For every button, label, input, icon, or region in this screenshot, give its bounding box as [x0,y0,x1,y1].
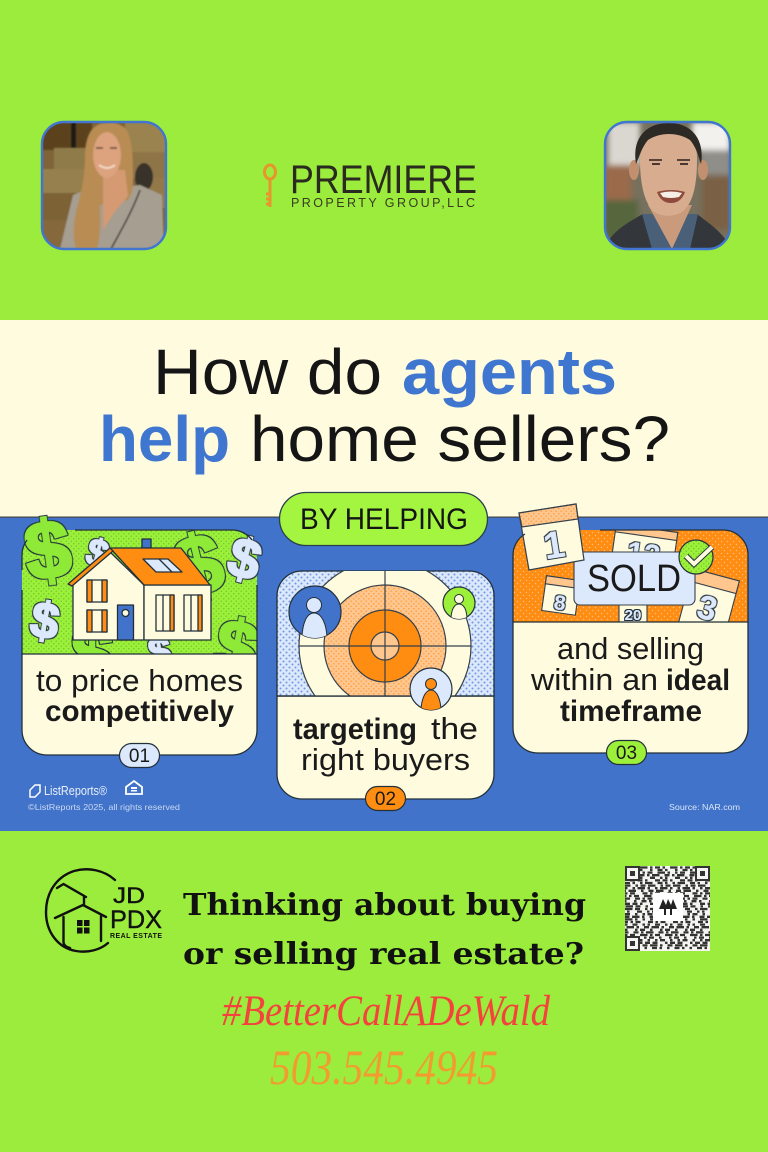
logo: Premiere Property Group: PROPERTY GROUP,LLC [291,196,475,210]
card 1 illustration [22,514,263,654]
icon: green check badge [679,540,713,574]
card 2 caption text: targeting [293,713,417,746]
card 2 caption text: the [431,711,478,746]
icon: green person [443,587,475,620]
pill heading: by helping: BY HELPING [300,503,468,536]
card 3 illustration: 12 [625,536,662,573]
card 3 caption text [530,631,730,728]
blue content panel [0,516,768,831]
photo: woman agent [42,122,166,249]
card 2 caption text [293,711,478,777]
panel: card 2 targeting [277,560,494,810]
icon: house [68,539,211,640]
calendar: 8 [541,576,580,617]
footer: ListReports branding: ListReports® [44,783,107,798]
title: help [99,403,230,475]
SOLD plate: SOLD [587,558,681,600]
icon: ListReports mark [30,785,40,797]
card 3 caption text: and selling [557,631,704,666]
badge 03 [606,740,646,764]
badge 03: 03 [616,743,637,764]
card 2 caption panel [277,696,494,799]
card 1 illustration: $ [222,524,268,593]
logo: JD PDX Real Estate [46,869,162,952]
cream title band [0,320,768,518]
pill heading: by helping [280,492,488,546]
logo: Premiere Property Group [264,158,477,210]
card 1 illustration: $ [71,612,113,697]
icon: equal housing [126,781,142,794]
card 1 outline [22,530,257,654]
badge 01 [120,744,160,768]
card 1 caption text: to price homes [36,663,243,698]
card 2 target illustration [276,570,495,697]
call to action text [183,888,586,972]
icon: house in oval [46,869,115,952]
SOLD plate [574,552,695,605]
card 1 illustration: $ [19,502,77,599]
icon: gold key [264,165,276,207]
logo: JD PDX Real Estate: REAL ESTATE [110,933,162,940]
phone number: 503.545.4945 [270,1039,498,1095]
card 3 outline [513,530,748,622]
logo: JD PDX Real Estate: JD [113,883,145,908]
call to action text: Thinking about buying [183,888,586,923]
hashtag: #BetterCallADeWald [222,988,550,1035]
card 1 illustration: $ [208,603,264,694]
photo: man agent [604,122,730,249]
logo: Premiere Property Group: PREMIERE [290,158,477,202]
card 3 caption text: timeframe [560,695,702,728]
card 3 illustration: 20 [625,607,641,624]
badge 02 [366,786,406,810]
panel: card 1 price homes [19,502,268,768]
title: agents [402,336,617,408]
footer: ListReports branding: ©ListReports 2025, all rights reserved [28,802,180,812]
calendar: 1: 1 [541,524,568,568]
QR code [625,866,710,951]
call to action text: or selling real estate? [183,937,584,972]
icon: blue person [289,586,341,640]
card 3 caption text: ideal [666,664,730,697]
card 1 caption text: competitively [45,695,234,728]
card 2 caption text: right buyers [301,742,470,777]
card 3 caption panel [513,622,748,753]
card 1 caption text [36,663,243,728]
card 1 illustration: $ [146,629,174,675]
icon: orange person [410,668,452,712]
footer: ListReports branding [28,781,180,812]
calendar: 1 [519,504,584,570]
title [99,336,670,475]
card 1 illustration: $ [26,591,64,651]
title: How do [153,336,382,408]
card 3 caption text: within an [530,662,658,697]
card 1 illustration: $ [82,531,113,577]
card 1 illustration: $ [165,514,233,616]
card 3 illustration [514,530,748,622]
calendar: 8: 8 [552,591,568,616]
footer: source: Source: NAR.com [669,802,740,812]
badge 01: 01 [129,746,150,767]
card 1 caption panel [22,654,257,755]
badge 02: 02 [375,789,396,810]
card 3 illustration: 3 [693,588,721,629]
title: home sellers? [250,403,670,475]
panel: card 3 ideal timeframe [513,504,748,764]
logo: JD PDX Real Estate: PDX [110,906,162,934]
